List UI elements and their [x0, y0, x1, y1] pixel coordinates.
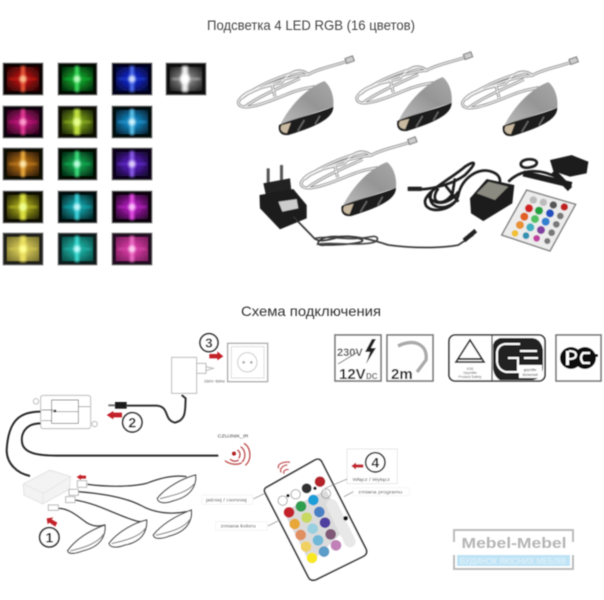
badge: voltage: DC — [366, 372, 378, 381]
panel: product photo — [238, 52, 588, 251]
remote outline — [264, 459, 367, 580]
power adapter — [259, 165, 477, 247]
badge: cable length — [387, 335, 433, 383]
lamp outline 1 — [157, 475, 196, 503]
badge: voltage — [335, 335, 381, 383]
badge: GS safety mark: VDE — [466, 367, 474, 371]
number 3 with arrow: 3 — [205, 336, 213, 351]
DC plug cable — [108, 395, 186, 423]
number 1 with arrow: 1 — [45, 529, 53, 545]
main cables — [7, 412, 218, 476]
number 2 with arrow — [107, 411, 142, 432]
lamp 1 — [238, 56, 354, 135]
swatch: orange — [3, 148, 43, 180]
swatch: sky blue — [112, 106, 152, 138]
remote buttons — [278, 476, 350, 563]
label: programme change: zmiana programu — [358, 489, 403, 494]
swatch: white — [166, 63, 206, 95]
swatch: green — [58, 63, 97, 95]
badge: GS safety mark: geprüfte — [524, 368, 536, 372]
lamp outline 4 — [68, 525, 105, 553]
red arrow to connector — [77, 474, 86, 480]
watermark: Mebel-Mebel — [454, 530, 573, 569]
control unit — [33, 395, 97, 429]
heading: connection diagram: Схема подключения — [241, 303, 381, 319]
swatch: cyan — [58, 191, 97, 223]
label: colour change: zmiana koloru — [221, 524, 256, 529]
number 1 with arrow — [40, 517, 59, 547]
swatch: violet — [112, 148, 152, 180]
swatch: lime — [58, 106, 97, 138]
watermark: Mebel-Mebel: БУДИНОК ЯКІСНИХ МЕБЛІВ — [460, 557, 566, 566]
swatch: emerald — [58, 148, 97, 180]
label: programme change — [344, 488, 409, 497]
swatch: teal — [58, 233, 97, 265]
junction box — [23, 470, 71, 504]
badge: voltage: 230V — [337, 347, 363, 359]
IR sensor — [218, 433, 250, 465]
swatch: blue — [112, 63, 152, 95]
swatch: magenta — [112, 191, 152, 223]
panel: certification badges — [335, 335, 601, 383]
wall socket — [228, 343, 268, 382]
panel: remote diagram — [202, 449, 409, 580]
swatch: red — [3, 63, 43, 95]
lamp 4 — [301, 137, 417, 216]
watermark: Mebel-Mebel: Mebel-Mebel — [462, 535, 566, 552]
number 3 with arrow — [200, 334, 223, 360]
badge: PCT mark — [556, 335, 601, 381]
IR sensor: CZUJNIK_IR — [218, 433, 248, 438]
lamp 3 — [462, 57, 578, 136]
power supply: 230V~50Hz — [204, 379, 225, 384]
swatch: pink — [3, 106, 43, 138]
swatch: pale yellow — [3, 233, 43, 265]
number 2 with arrow: 2 — [128, 414, 136, 430]
badge: GS safety mark: Product Safety — [459, 375, 482, 379]
badge: GS safety mark: Sicherheit — [522, 373, 538, 377]
remote control — [502, 190, 576, 251]
swatch: rose — [112, 233, 152, 265]
lamp cables — [58, 476, 187, 526]
label: colour change — [216, 520, 280, 530]
lamp outline 2 — [153, 510, 191, 538]
lamp outline 3 — [109, 520, 147, 547]
badge: voltage: 12V — [339, 366, 366, 383]
swatch: yellow — [3, 191, 43, 223]
number 4 callout: 4 — [371, 454, 379, 470]
number 4 callout — [325, 449, 397, 488]
panel: wiring diagram — [7, 334, 268, 553]
controller and cables — [408, 155, 588, 221]
label: on/off dimming — [202, 493, 265, 504]
power supply — [172, 357, 225, 393]
connectors — [48, 481, 87, 510]
title: LED lighting: Подсветка 4 LED RGB (16 цветов) — [207, 17, 415, 33]
lamp 2 — [357, 52, 473, 131]
badge: GS safety mark — [449, 335, 545, 381]
label: on/off dimming: jaśniej / ciemniej — [205, 497, 247, 502]
badge: cable length: 2m — [391, 366, 413, 383]
panel: colour swatches — [3, 63, 206, 265]
badge: GS safety mark: Geprüfte — [463, 371, 477, 375]
remote signal waves — [278, 462, 290, 474]
number 4 callout: Włącz / Wyłącz — [353, 477, 390, 482]
